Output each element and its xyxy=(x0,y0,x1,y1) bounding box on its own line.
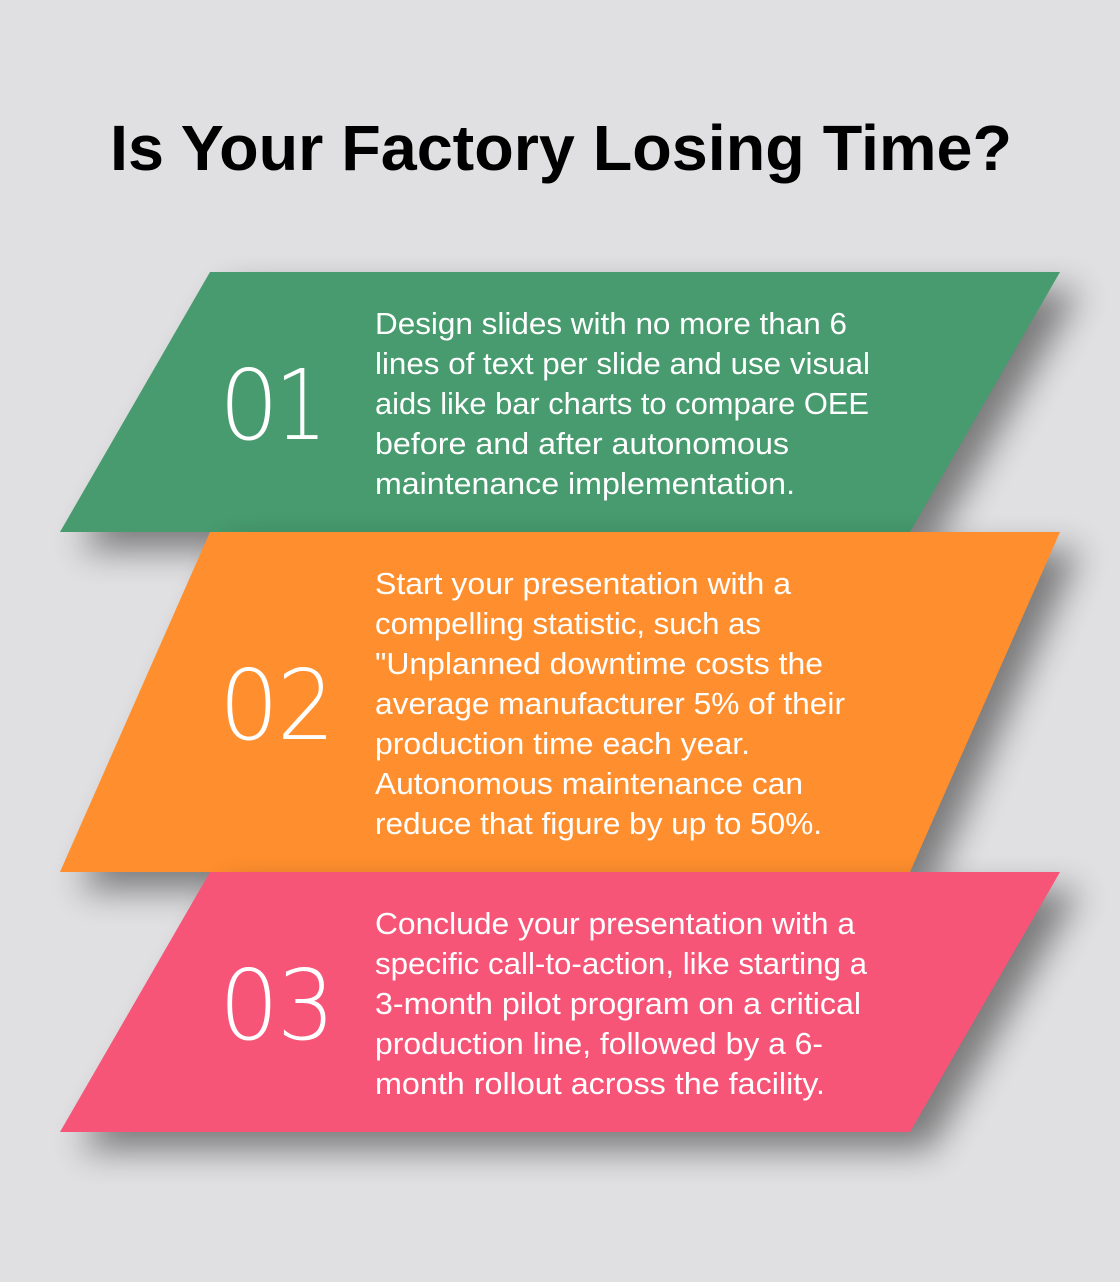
panel: step 02: average manufacturer 5% of their xyxy=(375,686,845,721)
panel: step 01: before and after autonomous xyxy=(375,426,789,461)
panel: step 03: production line, followed by a 6- xyxy=(375,1026,823,1061)
panel: step 02: Start your presentation with a xyxy=(375,566,792,601)
panel: step 03: Conclude your presentation with a xyxy=(375,906,856,941)
panel: step 02: "Unplanned downtime costs the xyxy=(375,646,823,681)
panel: step 02: 0 xyxy=(219,649,279,762)
panel: step 03: month rollout across the facility. xyxy=(375,1066,825,1101)
panel: step 03: 3 xyxy=(277,949,335,1062)
panel: step 02 xyxy=(60,532,1080,890)
panel: step 01: maintenance implementation. xyxy=(375,466,795,501)
panel: step 01: aids like bar charts to compare OEE xyxy=(375,386,869,421)
panel: step 02: Autonomous maintenance can xyxy=(375,766,803,801)
panel: step 02: compelling statistic, such as xyxy=(375,606,761,641)
panel: step 01: 1 xyxy=(275,349,327,462)
panel: step 02: reduce that figure by up to 50%. xyxy=(375,806,822,841)
panel: step 03: 0 xyxy=(219,949,279,1062)
panel: step 01: Design slides with no more than 6 xyxy=(375,306,847,341)
panel: step 02: production time each year. xyxy=(375,726,750,761)
panel: step 03 xyxy=(60,872,1080,1150)
panel: step 01: lines of text per slide and use visual xyxy=(375,346,870,381)
panel: step 01 xyxy=(60,272,1080,550)
title: Is Your Factory Losing Time? xyxy=(110,112,1012,184)
panel: step 03: 3-month pilot program on a critical xyxy=(375,986,861,1021)
panel: step 03: specific call-to-action, like starting a xyxy=(375,946,868,981)
panel: step 01: 0 xyxy=(219,349,279,462)
panel: step 02: 2 xyxy=(277,649,335,762)
